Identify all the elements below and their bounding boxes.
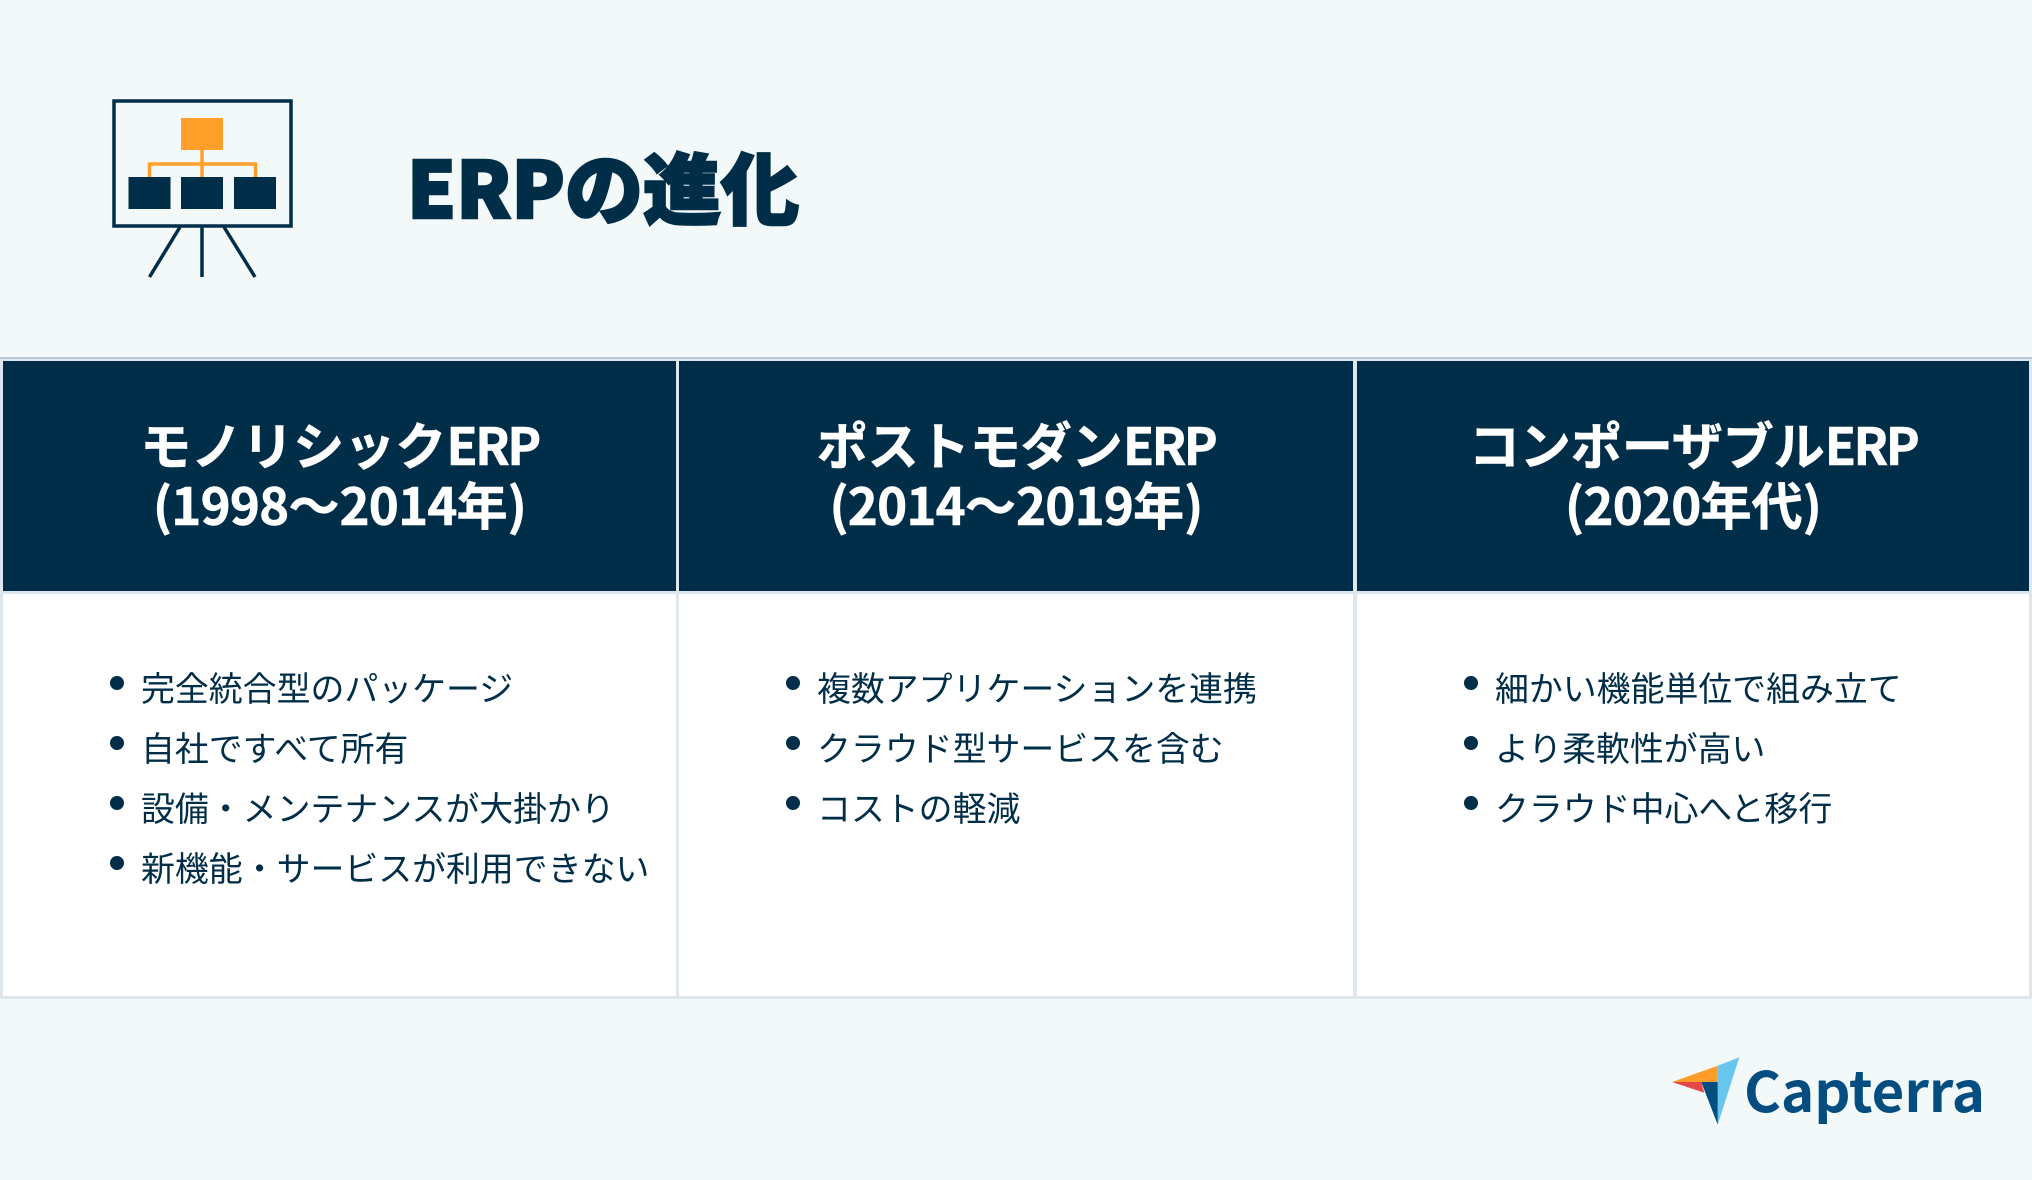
- bullet list: monolithic: 自社ですべて所有: [141, 722, 408, 771]
- title: ERPの進化: [407, 129, 799, 241]
- column heading: monolithic: (1998～2014年): [153, 466, 526, 540]
- column body: monolithic: [3, 594, 676, 996]
- bullet list: composable: [1464, 662, 1902, 831]
- bullet list: composable: 細かい機能単位で組み立て: [1495, 662, 1902, 711]
- panel: composable ERP: [1354, 357, 2032, 999]
- bullet list: composable: クラウド中心へと移行: [1495, 782, 1832, 831]
- bullet list: monolithic: 新機能・サービスが利用できない: [141, 842, 649, 891]
- column heading: post-modern: [679, 361, 1353, 591]
- column heading: monolithic: [3, 361, 676, 591]
- column heading: composable: コンポーザブルERP: [1469, 406, 1917, 480]
- column heading: composable: [1357, 361, 2029, 591]
- column body: composable: [1357, 594, 2029, 996]
- panel: monolithic ERP: [0, 357, 677, 999]
- column heading: composable: (2020年代): [1565, 466, 1821, 540]
- column body: post-modern: [679, 594, 1353, 996]
- column heading: post-modern: (2014～2019年): [829, 466, 1203, 540]
- bullet list: post-modern: 複数アプリケーションを連携: [817, 662, 1257, 711]
- bullet list: monolithic: 完全統合型のパッケージ: [141, 662, 513, 711]
- panel: post-modern ERP: [676, 357, 1354, 999]
- icon: presentation board with org chart: [112, 99, 293, 278]
- logo: Capterra: Capterra: [1744, 1050, 1985, 1129]
- bullet list: monolithic: [110, 662, 649, 891]
- column heading: monolithic: モノリシックERP: [140, 406, 539, 480]
- bullet list: post-modern: コストの軽減: [817, 782, 1020, 831]
- bullet list: post-modern: クラウド型サービスを含む: [817, 722, 1224, 771]
- bullet list: monolithic: 設備・メンテナンスが大掛かり: [141, 782, 615, 831]
- bullet list: post-modern: [786, 662, 1257, 831]
- bullet list: composable: より柔軟性が高い: [1495, 722, 1765, 771]
- column heading: post-modern: ポストモダンERP: [817, 406, 1215, 480]
